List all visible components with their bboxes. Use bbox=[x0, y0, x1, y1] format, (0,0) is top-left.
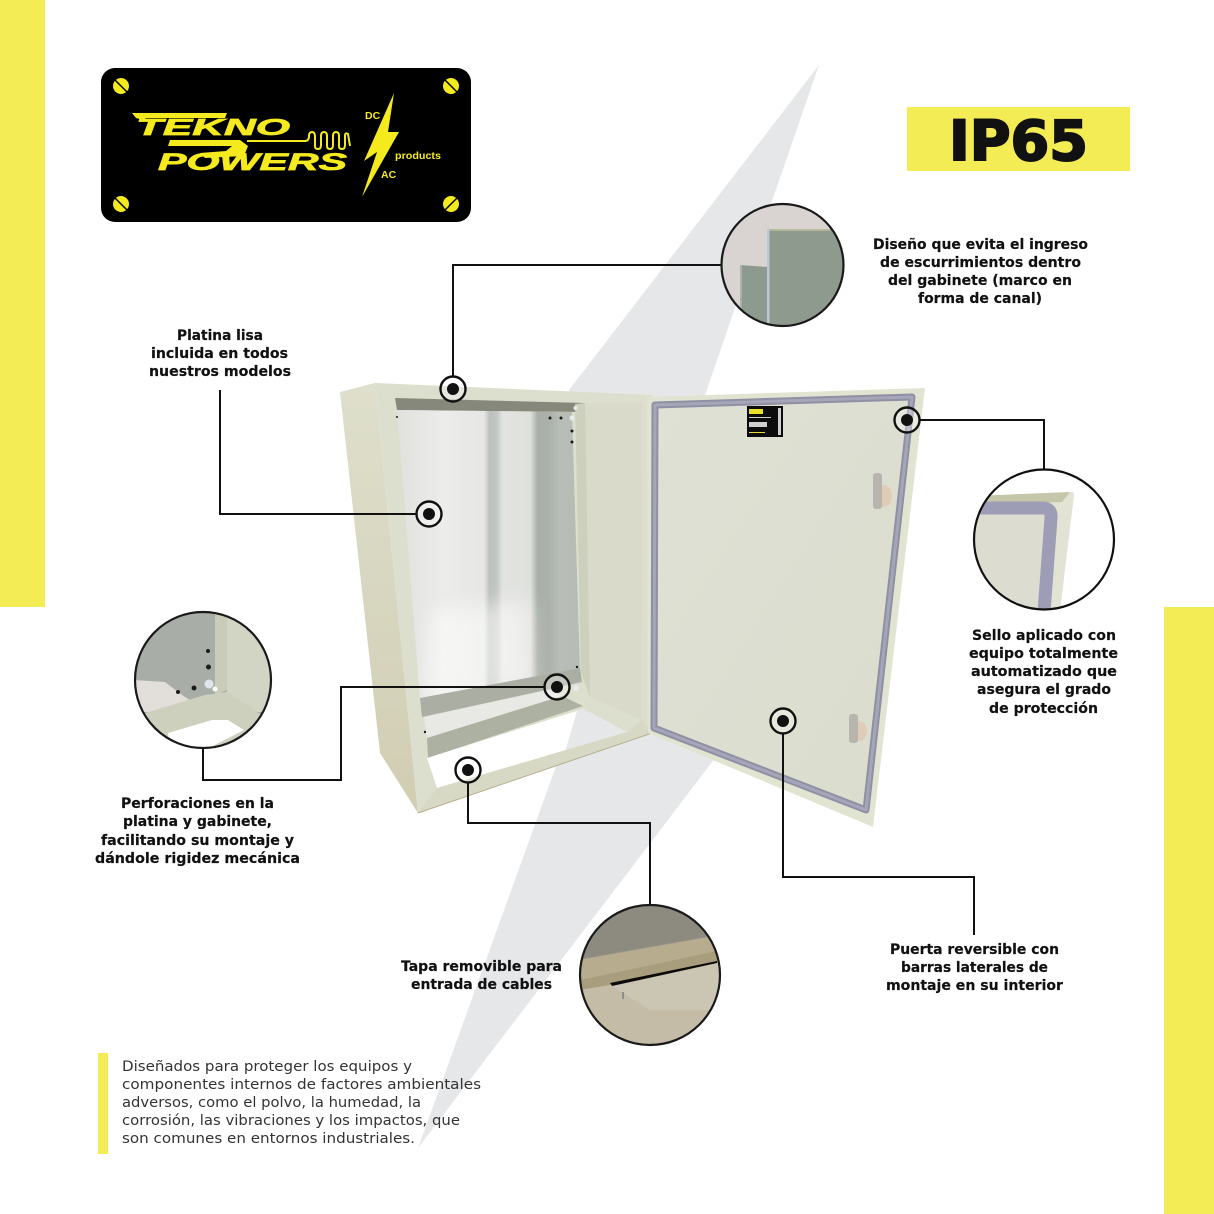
description paragraph bbox=[122, 1059, 481, 1147]
description accent bar bbox=[98, 1053, 108, 1154]
logo labels bbox=[365, 110, 441, 181]
text: seal: asegura el grado bbox=[977, 682, 1111, 698]
lower mounting bar bbox=[427, 696, 583, 758]
text: channel frame: del gabinete (marco en bbox=[888, 273, 1072, 289]
connector: perforations bbox=[203, 687, 544, 780]
bottom rail bbox=[418, 720, 652, 813]
cable opening bbox=[427, 709, 627, 788]
cabinet front frame bbox=[375, 383, 652, 813]
logo labels: DC bbox=[365, 110, 381, 122]
lower door latch bbox=[849, 714, 867, 743]
connector: reversible door bbox=[783, 734, 974, 935]
text: perforations: dándole rigidez mecánica bbox=[95, 851, 300, 867]
logo bolt bbox=[362, 93, 399, 197]
text: perforations: Perforaciones en la bbox=[121, 796, 274, 812]
left yellow bar bbox=[0, 0, 45, 607]
mounting plate bbox=[390, 405, 585, 705]
connector: removable cover bbox=[468, 783, 650, 905]
text: plate: incluida en todos bbox=[151, 346, 288, 362]
text: seal: equipo totalmente bbox=[969, 646, 1118, 662]
cabinet left side bbox=[340, 383, 418, 813]
door gasket bbox=[654, 397, 912, 810]
text: perforations bbox=[95, 796, 300, 867]
description paragraph: corrosión, las vibraciones y los impactos, que bbox=[122, 1113, 460, 1129]
marker: perforations bbox=[544, 674, 570, 700]
text: seal bbox=[969, 628, 1118, 717]
marker: removable cover bbox=[456, 758, 480, 782]
door inner panel bbox=[654, 397, 912, 810]
bolt on plate bbox=[570, 406, 579, 691]
description paragraph: Diseñados para proteger los equipos y bbox=[122, 1059, 412, 1075]
door outer frame bbox=[647, 388, 925, 827]
cabinet body photo bbox=[340, 383, 653, 813]
connector: seal bbox=[920, 420, 1044, 470]
IP65 badge bbox=[907, 107, 1130, 173]
cabinet right inner wall bbox=[585, 403, 642, 720]
text: seal: de protección bbox=[989, 701, 1098, 717]
logo wordmark: POWERS bbox=[158, 149, 347, 176]
detail circle: removable cover bbox=[580, 905, 721, 1046]
sticker text lines bbox=[749, 408, 781, 435]
text: plate: Platina lisa bbox=[177, 328, 263, 344]
text: channel frame: de escurrimientos dentro bbox=[880, 255, 1081, 271]
inner wall strip bbox=[575, 403, 590, 697]
text: perforations: facilitando su montaje y bbox=[101, 833, 294, 849]
logo wordmark: TEKNO bbox=[136, 114, 290, 140]
text: reversible door: barras laterales de bbox=[901, 960, 1048, 976]
text: removable cover bbox=[401, 959, 562, 993]
upper door latch bbox=[873, 473, 892, 509]
text: perforations: platina y gabinete, bbox=[123, 814, 272, 830]
IP65 badge: IP65 bbox=[949, 109, 1088, 173]
text: channel frame: Diseño que evita el ingreso bbox=[873, 237, 1088, 253]
marker: seal bbox=[894, 408, 920, 432]
text: removable cover: entrada de cables bbox=[411, 977, 552, 993]
logo labels: AC bbox=[381, 169, 397, 181]
logo wire bbox=[247, 132, 350, 149]
plate holes bbox=[396, 416, 578, 733]
text: removable cover: Tapa removible para bbox=[401, 959, 562, 975]
text: seal: automatizado que bbox=[971, 664, 1117, 680]
text: channel frame: forma de canal) bbox=[918, 291, 1042, 307]
text: reversible door: Puerta reversible con bbox=[890, 942, 1059, 958]
detail circle: channel frame bbox=[720, 203, 846, 328]
description paragraph: componentes internos de factores ambientales bbox=[122, 1077, 481, 1093]
open door bbox=[647, 388, 925, 827]
description paragraph: adversos, como el polvo, la humedad, la bbox=[122, 1095, 421, 1111]
text: plate bbox=[149, 328, 291, 380]
text: seal: Sello aplicado con bbox=[972, 628, 1116, 644]
text: channel frame bbox=[873, 237, 1088, 307]
text: plate: nuestros modelos bbox=[149, 364, 291, 380]
connector: plate bbox=[220, 390, 416, 514]
description paragraph: son comunes en entornos industriales. bbox=[122, 1131, 415, 1147]
connector: top frame bbox=[453, 265, 721, 376]
detail circle: gasket bbox=[970, 469, 1115, 612]
text: reversible door: montaje en su interior bbox=[886, 978, 1063, 994]
sticker mark bbox=[749, 409, 763, 414]
marker: plate bbox=[416, 502, 442, 526]
text: reversible door bbox=[886, 942, 1063, 994]
door sticker bbox=[747, 406, 783, 437]
logo screws bbox=[113, 78, 459, 212]
background lightning bolt bbox=[418, 65, 819, 1148]
plate lower light section bbox=[424, 690, 562, 738]
marker: reversible door bbox=[770, 708, 796, 734]
logo wordmark bbox=[132, 113, 347, 176]
hinges bbox=[649, 420, 653, 716]
right yellow bar bbox=[1164, 607, 1214, 1214]
marker: top frame bbox=[440, 376, 466, 402]
plate lower strip bbox=[420, 668, 582, 717]
cabinet top inner shadow bbox=[395, 398, 585, 412]
detail circle: perforations bbox=[134, 612, 273, 750]
logo labels: products bbox=[395, 150, 441, 162]
logo plate bbox=[101, 68, 471, 222]
